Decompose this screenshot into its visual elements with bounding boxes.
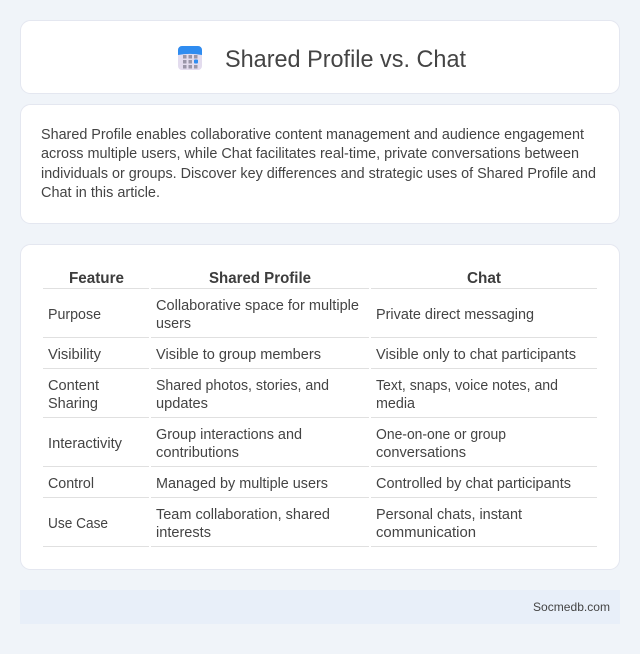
row: use case: communication <box>376 525 476 541</box>
row: use case: Personal chats, instant <box>376 507 522 523</box>
row: visibility <box>43 347 597 369</box>
table header <box>43 270 597 289</box>
row: interactivity: contributions <box>156 445 239 461</box>
row: control: Managed by multiple users <box>156 476 328 492</box>
table header: Feature <box>69 270 124 287</box>
intro paragraph: Shared Profile enables collaborative content management and audience engagement <box>41 127 584 143</box>
intro paragraph: Chat in this article. <box>41 185 160 201</box>
row: control <box>43 476 597 498</box>
footer bar <box>20 590 620 624</box>
row: purpose <box>43 298 597 338</box>
row: use case <box>43 507 597 547</box>
row: purpose: Private direct messaging <box>376 307 534 323</box>
row: content sharing: media <box>376 396 415 412</box>
row: visibility: Visible only to chat participants <box>376 347 576 363</box>
row: visibility: Visibility <box>48 347 102 363</box>
row: content sharing: Text, snaps, voice notes, and <box>376 378 558 394</box>
row: control: Controlled by chat participants <box>376 476 571 492</box>
row: content sharing: updates <box>156 396 208 412</box>
row: use case: Team collaboration, shared <box>156 507 330 523</box>
panel: comparison table <box>20 244 620 570</box>
row: interactivity: Interactivity <box>48 436 123 452</box>
row: interactivity: One-on-one or group <box>376 427 506 443</box>
title: Shared Profile vs. Chat <box>225 46 466 73</box>
row: content sharing <box>43 378 597 418</box>
intro paragraph: individuals or groups. Discover key differences and strategic uses of Shared Profile and <box>41 166 596 182</box>
panel: introduction <box>20 104 620 224</box>
row: purpose: users <box>156 316 191 332</box>
intro paragraph: across multiple users, while Chat facilitates real-time, private conversations between <box>41 146 579 162</box>
row: content sharing: Shared photos, stories, and <box>156 378 329 394</box>
row: interactivity <box>43 427 597 467</box>
row: content sharing: Sharing <box>48 396 98 412</box>
icon: calendar <box>178 46 202 70</box>
footer source text: Socmedb.com <box>533 600 610 614</box>
row: visibility: Visible to group members <box>156 347 321 363</box>
row: use case: Use Case <box>48 516 108 532</box>
panel: title header <box>20 20 620 94</box>
row: control: Control <box>48 476 94 492</box>
row: content sharing: Content <box>48 378 99 394</box>
intro paragraph <box>41 127 596 201</box>
table header: Shared Profile <box>209 270 311 287</box>
table header: Chat <box>467 270 502 287</box>
row: purpose: Purpose <box>48 307 101 323</box>
row: use case: interests <box>156 525 211 541</box>
row: purpose: Collaborative space for multiple <box>156 298 359 314</box>
row: interactivity: Group interactions and <box>156 427 302 443</box>
row: interactivity: conversations <box>376 445 466 461</box>
